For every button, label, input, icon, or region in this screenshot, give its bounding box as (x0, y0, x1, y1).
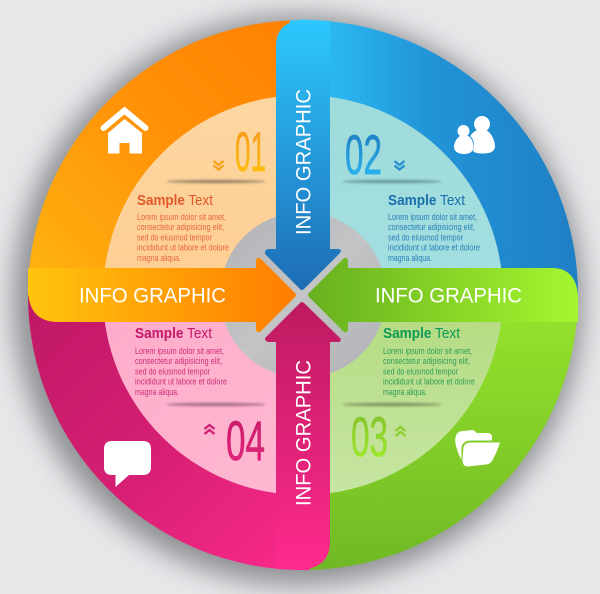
number 02: 02 (345, 123, 382, 186)
heading 03: Sample Text (383, 326, 460, 342)
body 02: magna aliqua. (388, 253, 432, 264)
quadrant: blue (290, 20, 578, 295)
icon: speech bubble (104, 441, 151, 487)
body 04: Lorem ipsum dolor sit amet, (135, 346, 224, 357)
body 04: incididunt ut labore et dolore (135, 377, 227, 388)
body 03 (383, 346, 475, 398)
body 01: consectetur adipisicing elit, (137, 222, 224, 233)
banner labels (79, 89, 522, 506)
inner panel: green (330, 322, 502, 494)
central gray disc (220, 212, 386, 378)
quadrant: pink (28, 295, 310, 570)
arrow banner: pink (265, 302, 341, 570)
text block 01 (137, 193, 229, 264)
arrow banner: blue (265, 20, 341, 290)
arrow banner: orange (28, 258, 296, 332)
quadrant: orange (28, 20, 290, 295)
text block 03 (383, 326, 475, 398)
chevron 04 (204, 425, 214, 434)
inner panel: orange (104, 96, 276, 268)
body 04: consectetur adipisicing elit, (135, 356, 222, 367)
body 03: sed do eiusmod tempor (383, 366, 458, 377)
body 03: incididunt ut labore et dolore (383, 377, 475, 388)
chevron 01 (214, 161, 224, 170)
chevron 02 (394, 161, 404, 170)
arrow banner: green (308, 258, 578, 332)
quadrant: green (310, 295, 578, 570)
body 01 (137, 212, 229, 264)
divider 03 (342, 403, 442, 406)
icon: people (454, 116, 495, 154)
body 04: sed do eiusmod tempor (135, 366, 210, 377)
text: 01 (235, 120, 266, 183)
body 03: consectetur adipisicing elit, (383, 356, 470, 367)
divider shadows (166, 180, 442, 406)
body 01: sed do eiusmod tempor (137, 232, 212, 243)
body 03: Lorem ipsum dolor sit amet, (383, 346, 472, 357)
body 04 (135, 346, 227, 398)
icon: folder (455, 430, 500, 466)
number 04: 04 (226, 409, 265, 472)
label: pink banner: INFO GRAPHIC (292, 360, 316, 506)
icon: house (104, 110, 146, 154)
label: orange banner: INFO GRAPHIC (79, 284, 226, 308)
divider 01 (166, 180, 266, 183)
inner light panels (90, 90, 516, 500)
chevron 03 (396, 427, 406, 436)
text block 04 (135, 326, 227, 398)
body 02: Lorem ipsum dolor sit amet, (388, 212, 477, 223)
label: green banner: INFO GRAPHIC (375, 284, 522, 308)
body 02: consectetur adipisicing elit, (388, 222, 475, 233)
number 03: 03 (351, 405, 388, 468)
body 01: Lorem ipsum dolor sit amet, (137, 212, 226, 223)
divider 04 (166, 403, 266, 406)
heading 02: Sample Text (388, 193, 465, 209)
body 02: incididunt ut labore et dolore (388, 243, 480, 254)
text block 02 (388, 193, 480, 264)
heading 04: Sample Text (135, 326, 212, 342)
inner panel: pink (104, 322, 276, 494)
label: blue banner: INFO GRAPHIC (292, 89, 316, 235)
heading 01: Sample Text (137, 193, 213, 209)
divider 02 (342, 180, 442, 183)
body 01: magna aliqua. (137, 253, 181, 264)
body 04: magna aliqua. (135, 387, 179, 398)
body 03: magna aliqua. (383, 387, 427, 398)
body 02: sed do eiusmod tempor (388, 232, 463, 243)
body 02 (388, 212, 480, 264)
inner panel: blue (330, 96, 502, 268)
body 01: incididunt ut labore et dolore (137, 243, 229, 254)
